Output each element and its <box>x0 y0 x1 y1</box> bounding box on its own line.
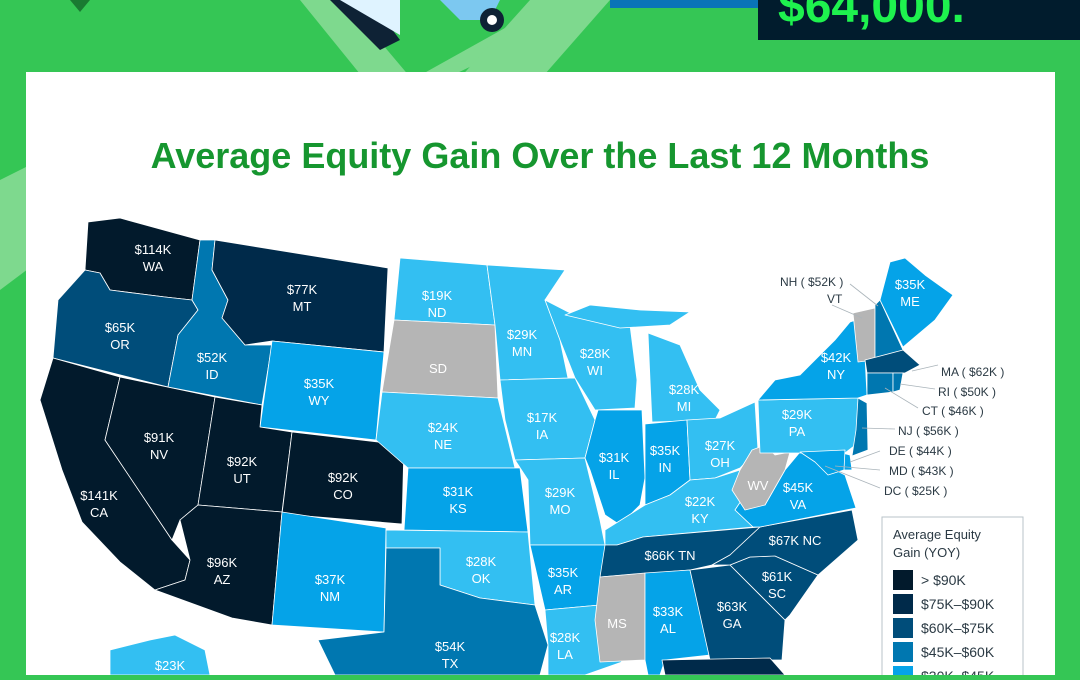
MT <box>212 240 388 352</box>
NH <box>875 300 903 360</box>
state labels: ND <box>428 305 446 320</box>
WY <box>260 341 384 440</box>
state labels: $35K <box>548 565 579 580</box>
NE <box>376 392 515 468</box>
state labels: OH <box>710 455 730 470</box>
header stat box <box>610 0 1080 40</box>
state labels: $35K <box>895 277 926 292</box>
state labels: MO <box>550 502 570 517</box>
state labels: $42K <box>821 350 852 365</box>
ME <box>880 258 953 347</box>
OR <box>53 270 198 387</box>
state labels: KY <box>691 511 709 526</box>
state labels: $19K <box>422 288 453 303</box>
AR <box>530 545 605 610</box>
state labels: $92K <box>328 470 359 485</box>
WI <box>545 300 637 410</box>
KS <box>404 468 528 532</box>
AL <box>645 570 710 675</box>
CT <box>867 373 893 395</box>
KY <box>605 470 753 545</box>
state labels: $63K <box>717 599 748 614</box>
state labels: $45K <box>783 480 814 495</box>
AK <box>110 635 210 675</box>
NM <box>272 512 386 632</box>
northeast callouts: MA ( $62K ) <box>941 365 1004 379</box>
state labels: WA <box>143 259 164 274</box>
MA <box>865 350 920 373</box>
state labels: LA <box>557 647 573 662</box>
state labels: $33K <box>653 604 684 619</box>
state labels: $28K <box>669 382 700 397</box>
state labels: NM <box>320 589 340 604</box>
state labels: $54K <box>435 639 466 654</box>
state labels: $141K <box>80 488 118 503</box>
northeast callouts: RI ( $50K ) <box>938 385 996 399</box>
state labels: CO <box>333 487 353 502</box>
CO <box>282 432 404 524</box>
VT <box>853 308 875 362</box>
state labels: $28K <box>466 554 497 569</box>
legend: Gain (YOY) <box>893 545 960 560</box>
state labels: IA <box>536 427 548 442</box>
NC <box>712 510 858 575</box>
ID <box>168 240 272 405</box>
state labels: ID <box>206 367 218 382</box>
state labels: AZ <box>214 572 230 587</box>
legend: $75K–$90K <box>921 596 995 612</box>
WV <box>732 445 790 510</box>
state labels: $23K <box>155 658 186 673</box>
northeast callouts <box>780 275 1004 498</box>
state labels: VA <box>790 497 807 512</box>
state labels: $61K <box>762 569 793 584</box>
ND <box>394 258 495 325</box>
state labels: $31K <box>443 484 474 499</box>
IL <box>585 410 645 525</box>
MN <box>487 265 568 380</box>
UT <box>198 397 292 512</box>
AZ <box>155 505 282 625</box>
SD <box>382 320 498 398</box>
state labels: $24K <box>428 420 459 435</box>
NY <box>758 318 867 400</box>
MO <box>515 458 605 545</box>
legend: > $90K <box>921 572 966 588</box>
state labels: $92K <box>227 454 258 469</box>
state labels: NE <box>434 437 452 452</box>
state labels: WV <box>748 478 769 493</box>
state labels <box>80 242 926 673</box>
state labels: $96K <box>207 555 238 570</box>
state labels: ME <box>900 294 920 309</box>
state labels: $29K <box>507 327 538 342</box>
legend <box>882 517 1023 680</box>
FL <box>662 658 785 675</box>
NJ <box>852 398 868 456</box>
state labels: $77K <box>287 282 318 297</box>
state labels: $28K <box>550 630 581 645</box>
NV <box>105 377 215 540</box>
state labels: NY <box>827 367 845 382</box>
state labels: OR <box>110 337 130 352</box>
state labels: GA <box>723 616 742 631</box>
state labels: UT <box>233 471 251 486</box>
state labels: WI <box>587 363 603 378</box>
MI upper <box>565 305 690 328</box>
northeast callouts: DC ( $25K ) <box>884 484 947 498</box>
northeast callouts: NH ( $52K ) <box>780 275 843 289</box>
state labels: $29K <box>782 407 813 422</box>
IA <box>500 378 595 460</box>
MS <box>595 573 645 662</box>
TN <box>600 527 760 577</box>
state labels: WY <box>309 393 330 408</box>
state labels: $35K <box>650 443 681 458</box>
state labels: $37K <box>315 572 346 587</box>
legend: Average Equity <box>893 527 981 542</box>
state labels: CA <box>90 505 108 520</box>
CA <box>40 358 190 590</box>
northeast callouts: CT ( $46K ) <box>922 404 984 418</box>
state labels: $28K <box>580 346 611 361</box>
OH <box>687 402 758 480</box>
northeast callouts: MD ( $43K ) <box>889 464 954 478</box>
state labels: IN <box>658 460 672 475</box>
state labels: MI <box>677 399 691 414</box>
LA <box>545 605 622 675</box>
state labels: MT <box>293 299 311 314</box>
WA <box>85 218 200 300</box>
PA <box>758 398 862 453</box>
state labels: TX <box>442 656 459 671</box>
state labels: IL <box>609 467 619 482</box>
state labels: MS <box>607 616 627 631</box>
state labels: $91K <box>144 430 175 445</box>
northeast callouts: NJ ( $56K ) <box>898 424 959 438</box>
state labels: $35K <box>304 376 335 391</box>
state labels: $66K TN <box>644 548 696 563</box>
state labels: MN <box>512 344 532 359</box>
state labels: $27K <box>705 438 736 453</box>
legend: $60K–$75K <box>921 620 995 636</box>
state labels: $67K NC <box>769 533 821 548</box>
legend: $45K–$60K <box>921 644 995 660</box>
state labels: KS <box>449 501 467 516</box>
GA <box>690 565 785 660</box>
state labels: $65K <box>105 320 136 335</box>
state labels: OK <box>472 571 491 586</box>
title: Average Equity Gain Over the Last 12 Months <box>151 135 929 176</box>
MI <box>648 333 720 422</box>
state labels: $29K <box>545 485 576 500</box>
VA <box>735 452 856 527</box>
state labels: AL <box>660 621 676 636</box>
state labels: AR <box>554 582 572 597</box>
northeast callouts: VT <box>827 292 843 306</box>
SC <box>730 556 818 620</box>
state labels: $114K <box>135 242 172 257</box>
MD <box>800 450 845 475</box>
state labels: $31K <box>599 450 630 465</box>
RI <box>893 373 903 392</box>
state labels: PA <box>789 424 806 439</box>
map <box>40 218 953 675</box>
state labels: SD <box>429 361 447 376</box>
northeast callouts: DE ( $44K ) <box>889 444 952 458</box>
TX <box>318 548 548 675</box>
state labels: SC <box>768 586 786 601</box>
state labels: $22K <box>685 494 716 509</box>
IN <box>645 420 690 505</box>
state labels: $17K <box>527 410 558 425</box>
DE <box>842 453 852 470</box>
state labels: NV <box>150 447 168 462</box>
state labels: $52K <box>197 350 228 365</box>
OK <box>386 530 535 605</box>
